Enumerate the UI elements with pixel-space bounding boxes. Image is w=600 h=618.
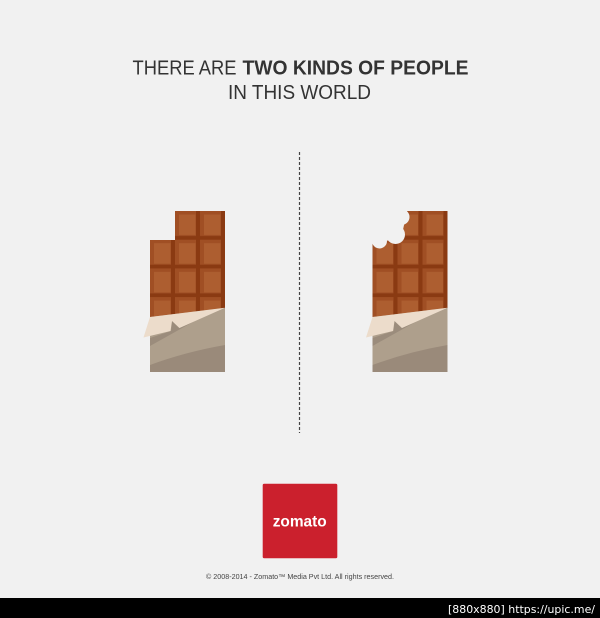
title <box>132 58 468 104</box>
logo: zomato: zomato <box>273 514 327 530</box>
copyright text: © 2008-2014 - Zomato™ Media Pvt Ltd. All rights reserved. <box>206 573 394 581</box>
logo: zomato <box>263 484 337 558</box>
title: IN THIS WORLD <box>228 82 371 104</box>
divider: dashed line <box>298 152 300 433</box>
watermark: [880x880] https://upic.me/ <box>448 603 595 616</box>
title: THERE ARE <box>132 58 236 80</box>
icon: chocolate bar with a bite taken <box>366 209 448 372</box>
title: TWO KINDS OF PEOPLE <box>242 58 468 80</box>
icon: chocolate bar with a row broken off <box>144 211 225 372</box>
bite mark <box>370 209 410 248</box>
